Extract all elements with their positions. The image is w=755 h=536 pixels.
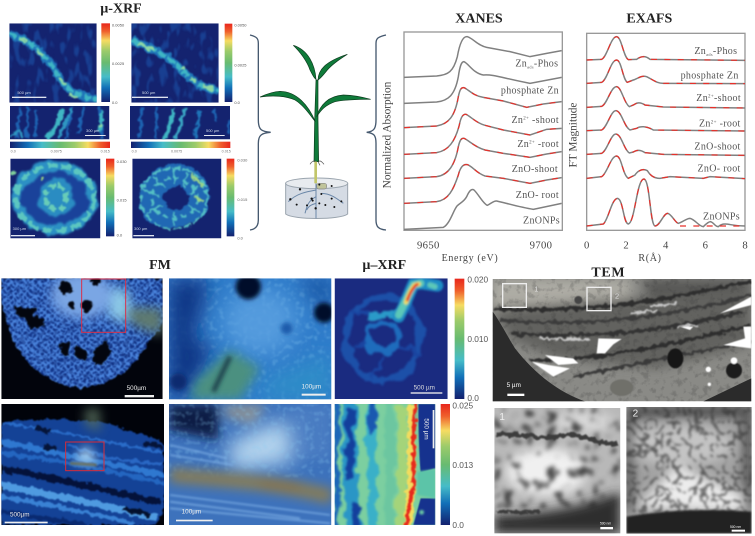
scale bar: 100µm bbox=[182, 509, 201, 516]
EXAFS x axis labels: 8 bbox=[742, 240, 748, 251]
heading: FM: FM bbox=[149, 258, 171, 273]
heading: mu-XRF: µ-XRF bbox=[100, 2, 142, 17]
colorbar labels: 0.0025 bbox=[234, 62, 247, 67]
micrograph: root cross-section detail bbox=[169, 278, 332, 400]
scale bar: 500 nm bbox=[730, 525, 741, 529]
chart: EXAFS: 2+ bbox=[711, 120, 717, 125]
chart: XANES: -shoot bbox=[529, 115, 559, 126]
inset numbers: 2 bbox=[615, 291, 619, 300]
scale bar bbox=[507, 382, 524, 396]
chart: EXAFS: ads bbox=[706, 52, 713, 57]
chart: EXAFS: -shoot bbox=[714, 93, 741, 104]
panel number: 1 bbox=[499, 412, 505, 423]
y axis label: FT magnitude: FT Magnitude bbox=[568, 103, 580, 167]
chart: XANES: Zn bbox=[515, 59, 527, 70]
heading: XANES: XANES bbox=[455, 12, 503, 27]
chart: EXAFS bbox=[587, 33, 745, 230]
scale bar: 5 µm bbox=[507, 382, 521, 389]
colorbar labels: 0.0 bbox=[237, 235, 244, 240]
colorbar labels: 0.020 bbox=[467, 275, 489, 285]
colorbar labels: 0.0 bbox=[112, 100, 118, 105]
chart: EXAFS: ZnO- root bbox=[697, 164, 741, 175]
EXAFS x axis labels: 6 bbox=[703, 240, 709, 251]
y axis label: normalized absorption: Normalized Absorption bbox=[382, 81, 394, 188]
scale bar: 500 µm bbox=[206, 128, 220, 133]
micrograph: stem section detail bbox=[169, 404, 332, 525]
colorbar labels: 0.030 bbox=[117, 159, 127, 164]
micrograph: TEM overview bbox=[492, 279, 752, 402]
scale bar: 500µm bbox=[10, 511, 29, 518]
colorbar bbox=[455, 279, 464, 399]
chart: XANES: -Phos bbox=[534, 59, 558, 70]
chart: XANES: Zn bbox=[511, 115, 523, 126]
chart: XANES: ads bbox=[527, 65, 534, 70]
chart: EXAFS: phosphate Zn bbox=[681, 70, 739, 81]
horizontal colorbar B: 0.015 bbox=[222, 149, 231, 153]
section: top mu-XRF maps bbox=[9, 2, 248, 240]
x axis title: R: R(Å) bbox=[638, 252, 662, 264]
chart: EXAFS: Zn bbox=[694, 46, 706, 57]
micrograph: stem longitudinal section bbox=[1, 404, 164, 525]
colorbar labels: 0.0025 bbox=[112, 61, 125, 66]
heading: mu-XRF: µ–XRF bbox=[362, 258, 406, 273]
colorbar labels bbox=[117, 159, 127, 238]
icon: seedling bbox=[260, 45, 371, 162]
colorbar bbox=[106, 159, 114, 236]
inset box 1 bbox=[503, 284, 526, 307]
XANES x axis labels: 9700 bbox=[530, 240, 552, 251]
EXAFS x axis labels: 0 bbox=[584, 240, 589, 251]
chart: EXAFS: Zn bbox=[696, 93, 708, 104]
colorbar labels bbox=[237, 158, 248, 240]
scale bar bbox=[176, 509, 213, 521]
map: root section B bbox=[132, 158, 222, 238]
colorbar labels: 0.0 bbox=[452, 520, 464, 530]
colorbar bbox=[101, 23, 110, 102]
scale bar bbox=[125, 385, 154, 397]
chart: XANES: Zn bbox=[517, 139, 529, 150]
section: TEM images bbox=[493, 265, 752, 534]
colorbar labels: 0.025 bbox=[452, 401, 474, 411]
colorbar labels: 0.0050 bbox=[112, 23, 125, 28]
chart: XANES: ZnO- root bbox=[516, 190, 559, 201]
chart: XANES: ZnO-shoot bbox=[512, 164, 558, 175]
colorbar labels: 0.0 bbox=[117, 233, 123, 238]
XANES x axis labels bbox=[417, 240, 552, 251]
colorbar labels: 0.030 bbox=[237, 158, 248, 163]
EXAFS x axis labels: 4 bbox=[663, 240, 669, 251]
chart: EXAFS: Zn bbox=[699, 119, 711, 130]
colorbar labels bbox=[467, 275, 489, 403]
colorbar bbox=[441, 404, 450, 525]
scale bar bbox=[302, 383, 326, 396]
horizontal colorbar A: 0.0075 bbox=[51, 149, 62, 153]
icon: seedling root crown bbox=[310, 161, 324, 165]
horizontal colorbar A: 0.0 bbox=[11, 149, 16, 153]
map: stem zinc distribution bbox=[334, 404, 436, 525]
micrograph: TEM detail 2 bbox=[626, 407, 752, 534]
chart: XANES: 2+ bbox=[529, 141, 535, 146]
horizontal colorbar B: 0.0 bbox=[132, 149, 137, 153]
scale bar: 500 nm bbox=[600, 521, 611, 525]
chart: XANES: 2+ bbox=[523, 117, 529, 122]
horizontal colorbar B: 0.0075 bbox=[171, 149, 182, 153]
scale bar bbox=[5, 511, 48, 523]
inset numbers: 1 bbox=[534, 285, 538, 294]
scale bar: 500 µm bbox=[17, 90, 31, 95]
chart: XANES: -root bbox=[535, 139, 559, 150]
heading: EXAFS: EXAFS bbox=[626, 12, 672, 27]
map: stem section A bbox=[10, 106, 110, 140]
horizontal colorbar B bbox=[131, 142, 231, 153]
map: stem section B bbox=[130, 106, 230, 140]
map: leaf section A bbox=[9, 23, 97, 103]
colorbar bbox=[225, 24, 232, 102]
EXAFS x axis labels: 2 bbox=[623, 240, 629, 251]
chart: EXAFS: ZnONPs bbox=[703, 211, 740, 222]
colorbar labels: 0.0 bbox=[234, 100, 241, 105]
colorbar labels bbox=[234, 23, 247, 105]
micrograph: root cross-section bbox=[1, 278, 163, 399]
colorbar labels: 0.0 bbox=[467, 393, 479, 403]
scale bar: 100µm bbox=[302, 383, 321, 390]
x axis title: energy: Energy (eV) bbox=[442, 253, 498, 264]
chart: XANES: ZnONPs bbox=[523, 215, 560, 226]
scale bar: 300 µm bbox=[134, 226, 148, 231]
scale bar: 500µm bbox=[127, 385, 146, 392]
panel number: 2 bbox=[633, 408, 639, 419]
scale bar: 300 µm bbox=[13, 226, 27, 231]
chart: EXAFS: -root bbox=[717, 119, 741, 130]
chart: EXAFS: 2+ bbox=[708, 95, 714, 100]
scale bar: 500 µm bbox=[142, 90, 156, 95]
colorbar labels bbox=[112, 23, 125, 105]
brace: right bbox=[367, 35, 386, 230]
map: leaf section B bbox=[131, 23, 219, 103]
icon: culture dish bbox=[286, 162, 348, 218]
map: root section A bbox=[10, 158, 100, 238]
scale bar: 300 µm bbox=[86, 128, 100, 133]
chart: EXAFS: -Phos bbox=[713, 46, 737, 57]
map: root section zinc distribution bbox=[334, 278, 448, 399]
heading: TEM: TEM bbox=[591, 265, 625, 280]
EXAFS x axis labels bbox=[584, 240, 748, 251]
XANES x axis labels: 9650 bbox=[417, 240, 440, 251]
colorbar bbox=[227, 159, 234, 236]
colorbar labels: 0.015 bbox=[237, 197, 248, 202]
chart: EXAFS: ZnO-shoot bbox=[694, 142, 741, 153]
section: lower FM and mu-XRF images bbox=[1, 258, 489, 535]
inset box 2 bbox=[587, 287, 611, 311]
section: XANES and EXAFS spectra bbox=[382, 12, 748, 264]
chart: XANES bbox=[404, 32, 562, 230]
horizontal colorbar A: 0.015 bbox=[101, 149, 110, 153]
chart: XANES: phosphate Zn bbox=[501, 86, 559, 97]
scale bar: 500 µm bbox=[414, 385, 435, 392]
scale bar: 500 µm bbox=[422, 418, 429, 440]
colorbar labels: 0.0050 bbox=[234, 23, 247, 28]
brace: left bbox=[250, 35, 271, 230]
colorbar labels: 0.013 bbox=[452, 460, 474, 470]
inset numbers bbox=[534, 285, 619, 300]
horizontal colorbar A bbox=[10, 142, 110, 153]
colorbar labels: 0.010 bbox=[467, 334, 489, 344]
colorbar labels: 0.015 bbox=[117, 197, 127, 202]
section: plant and braces bbox=[250, 35, 386, 230]
colorbar labels bbox=[452, 401, 474, 530]
micrograph: TEM detail 1 bbox=[494, 408, 620, 534]
